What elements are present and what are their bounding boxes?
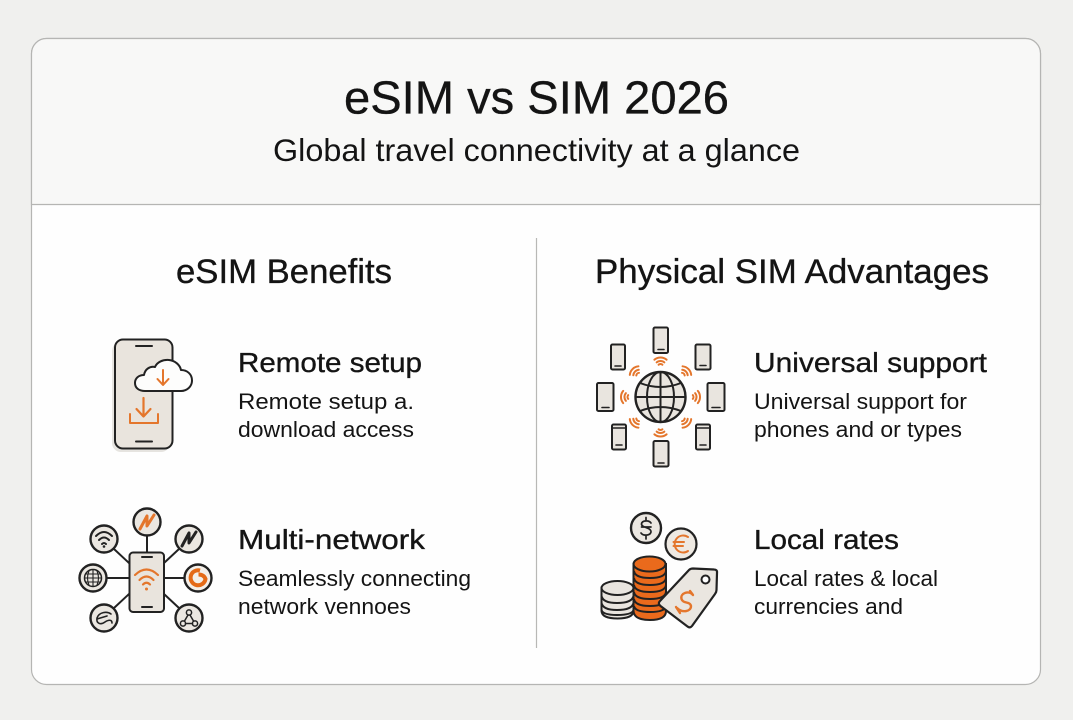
text: Remote setup description: Remote setup a. (238, 389, 414, 414)
icon: multi-network hub (80, 508, 212, 632)
text: Local rates description (754, 566, 938, 619)
text: Remote setup description (238, 389, 414, 442)
text: Universal support description: phones and or types (754, 417, 962, 442)
text: Universal support description (754, 389, 967, 442)
icon: phone with cloud download (112, 340, 192, 452)
heading: Multi-network: Multi-network (238, 524, 426, 555)
icon: globe with surrounding phones (597, 328, 724, 466)
heading: Physical SIM Advantages: Physical SIM Advantages (595, 253, 989, 291)
heading: Universal support: Universal support (754, 347, 987, 378)
text: Multi-network description (238, 566, 471, 619)
heading: eSIM Benefits: eSIM Benefits (176, 253, 392, 291)
icon: coins and price tag (602, 513, 717, 627)
text: Local rates description: Local rates & local (754, 566, 938, 591)
text: Remote setup description: download access (238, 417, 414, 442)
heading: Local rates: Local rates (754, 524, 899, 555)
heading: Remote setup: Remote setup (238, 347, 422, 378)
subtitle: Global travel connectivity at a glance (273, 132, 800, 168)
text: Local rates description: currencies and (754, 594, 903, 619)
column divider (536, 238, 538, 648)
text: Universal support description: Universal support for (754, 389, 967, 414)
title: eSIM vs SIM 2026 (344, 72, 729, 124)
text: Multi-network description: network vennoes (238, 594, 411, 619)
text: Multi-network description: Seamlessly connecting (238, 566, 471, 591)
